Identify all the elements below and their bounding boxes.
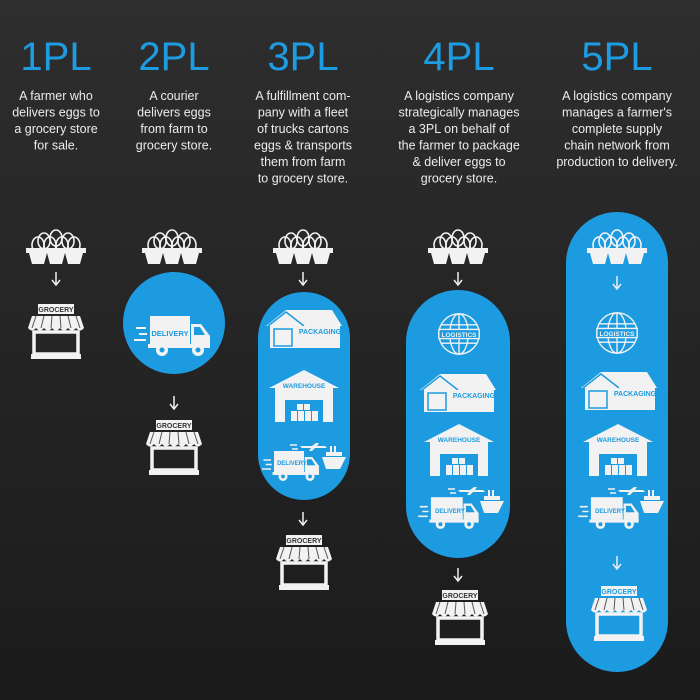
column 5PL description: A logistics company (562, 89, 673, 103)
pill 4PL: PACKAGING (453, 393, 496, 400)
column 5 flow pill: WAREHOUSE (597, 437, 640, 444)
column 5PL description: manages a farmer's (562, 106, 672, 120)
column 4PL description: A logistics company (404, 89, 515, 103)
column 2PL description: A courier (149, 89, 199, 103)
column 3PL description: eggs & transports (254, 138, 352, 152)
column 4 flow (406, 230, 510, 645)
column 1 flow: GROCERY (38, 307, 74, 314)
column 2 flow: GROCERY (156, 423, 192, 430)
column 2PL description: delivers eggs (137, 106, 211, 120)
column 3PL description: to grocery store. (258, 172, 348, 186)
column 5PL description: production to delivery. (556, 155, 678, 169)
column 5 flow pill (566, 212, 668, 672)
column 3PL heading: 3PL (267, 35, 339, 79)
column 1 flow (26, 230, 86, 359)
column 4PL description: & deliver eggs to (412, 155, 506, 169)
column 2PL description: from farm to (140, 122, 208, 136)
column 4PL heading: 4PL (423, 35, 495, 79)
column 5 flow pill: LOGISTICS (599, 331, 635, 338)
column 5 flow pill: GROCERY (601, 589, 637, 596)
column 4PL description: grocery store. (421, 172, 497, 186)
column 2PL heading: 2PL (138, 35, 210, 79)
blue circle with delivery truck: DELIVERY (151, 329, 189, 338)
pill 4PL: DELIVERY (435, 509, 465, 515)
column 1PL description: for sale. (34, 138, 78, 152)
pill 3PL: DELIVERY (277, 461, 307, 467)
column 3PL description: of trucks cartons (257, 122, 349, 136)
column 1PL description: A farmer who (19, 89, 93, 103)
column 2PL description: grocery store. (136, 138, 212, 152)
column 5PL description: complete supply (572, 122, 663, 136)
blue circle with delivery truck (123, 272, 225, 374)
column 5 flow pill: DELIVERY (595, 509, 625, 515)
column 5PL description: chain network from (564, 138, 670, 152)
column 5 flow pill: PACKAGING (614, 391, 657, 398)
column 4PL description: strategically manages (399, 106, 519, 120)
column 1PL description: delivers eggs to (12, 106, 100, 120)
pill 4PL (406, 290, 510, 558)
column 3PL description: pany with a fleet (258, 106, 349, 120)
column 5PL heading: 5PL (581, 35, 653, 79)
column 4 flow: GROCERY (442, 593, 478, 600)
column 3PL description: A fulfillment com- (255, 89, 351, 103)
pill 3PL: WAREHOUSE (283, 383, 326, 390)
pill 3PL: PACKAGING (299, 329, 342, 336)
pill 3PL (258, 292, 350, 500)
column 4PL description: the farmer to package (398, 138, 520, 152)
column 3PL description: them from farm (261, 155, 345, 169)
pill 4PL: LOGISTICS (441, 332, 477, 339)
column 3 flow: GROCERY (286, 538, 322, 545)
column 1PL heading: 1PL (20, 35, 92, 79)
column 3 flow (258, 230, 350, 590)
pill 4PL: WAREHOUSE (438, 437, 481, 444)
column 1PL description: a grocery store (14, 122, 98, 136)
column 2 flow (123, 230, 225, 475)
column 4PL description: a 3PL on behalf of (408, 122, 510, 136)
